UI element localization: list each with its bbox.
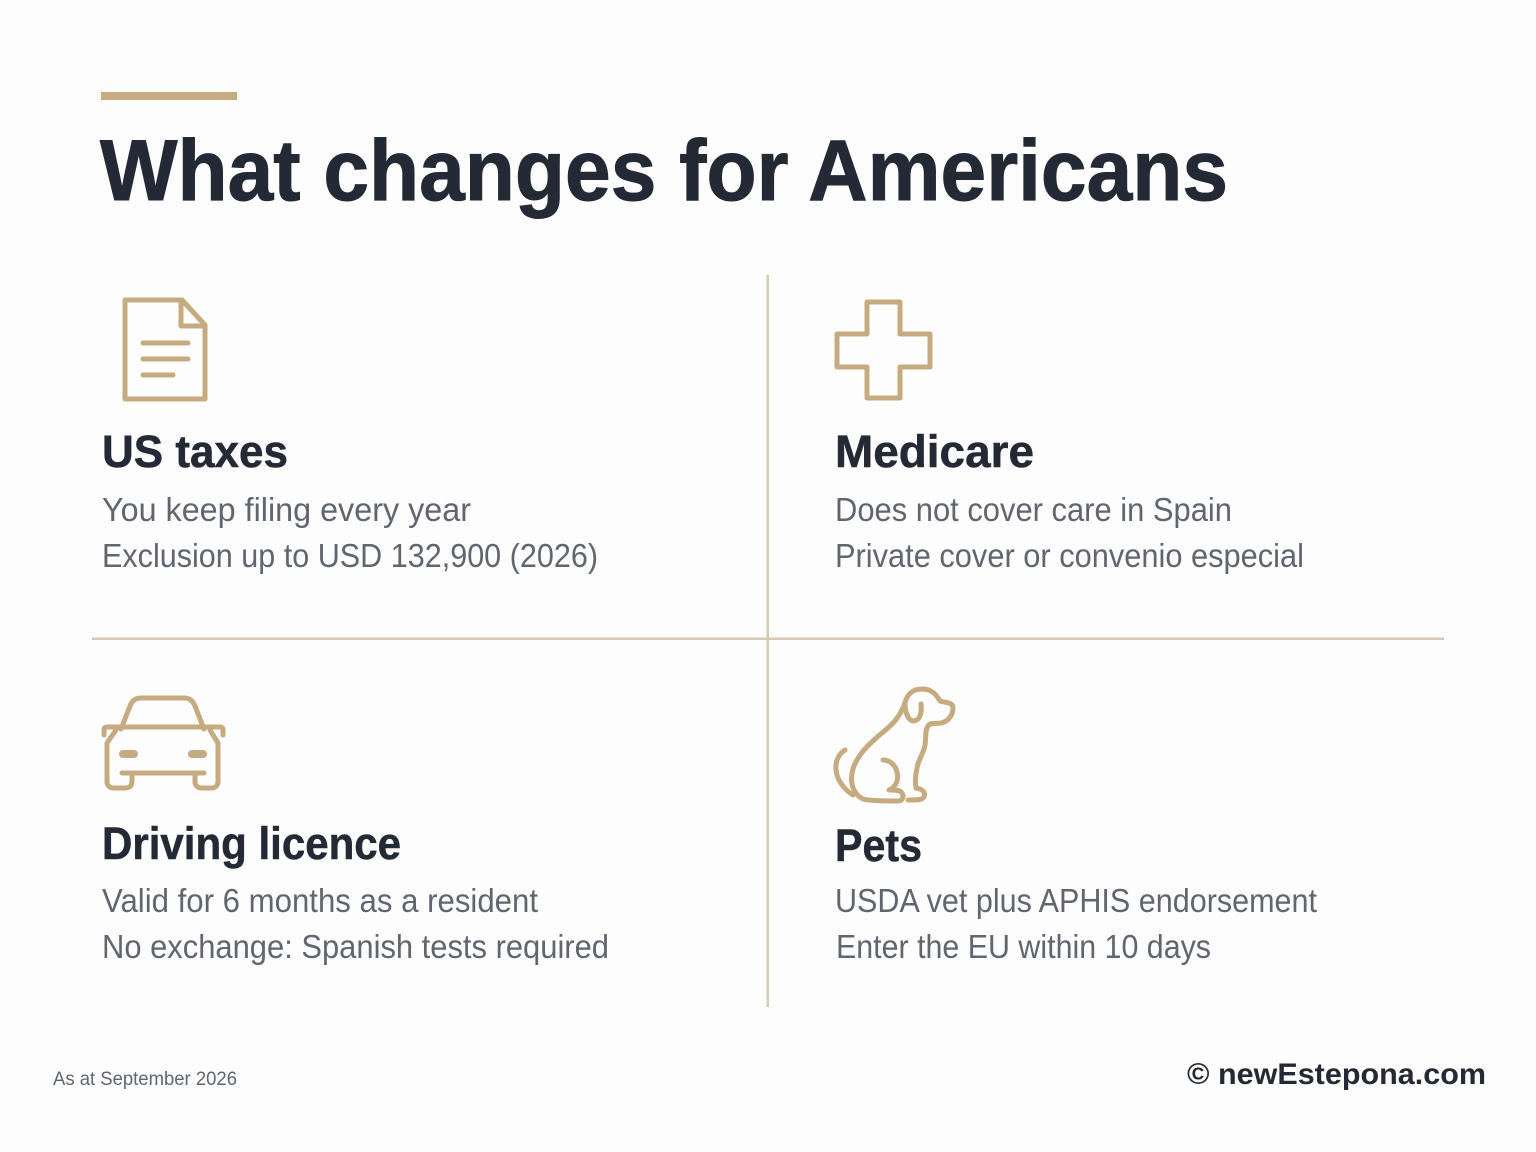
icon: document: [125, 300, 205, 399]
text: Medicare details: [835, 491, 1304, 574]
icon: dog: [836, 689, 953, 801]
icon: car: [104, 698, 223, 788]
title: What changes for Americans: [100, 123, 1228, 219]
heading: US taxes: US taxes: [102, 426, 288, 477]
text: Medicare details: Does not cover care in Spain: [835, 491, 1232, 528]
text: Medicare details: Private cover or convenio especial: [835, 537, 1304, 574]
text: US taxes details: Exclusion up to USD 132,900 (2026): [102, 537, 598, 574]
text: US taxes details: [102, 491, 598, 574]
heading: Pets: Pets: [835, 820, 922, 871]
footer copyright: © newEstepona.com: [1187, 1058, 1486, 1091]
text: Driving licence details: Valid for 6 months as a resident: [102, 882, 538, 919]
text: Pets details: Enter the EU within 10 days: [836, 928, 1211, 965]
panel: US taxes: [102, 300, 598, 574]
text: Pets details: USDA vet plus APHIS endorsement: [835, 882, 1317, 919]
heading: Driving licence: Driving licence: [102, 818, 401, 869]
icon: medical cross: [837, 302, 930, 398]
panel: Driving licence: [102, 698, 609, 965]
text: Driving licence details: [102, 882, 609, 965]
text: Pets details: [835, 882, 1317, 965]
footer date: As at September 2026: [53, 1069, 237, 1090]
panel: Pets: [835, 689, 1317, 965]
panel: Medicare: [835, 302, 1304, 574]
heading: Medicare: Medicare: [835, 426, 1034, 477]
text: US taxes details: You keep filing every year: [102, 491, 471, 528]
text: Driving licence details: No exchange: Spanish tests required: [102, 928, 609, 965]
accent bar: [101, 92, 237, 100]
